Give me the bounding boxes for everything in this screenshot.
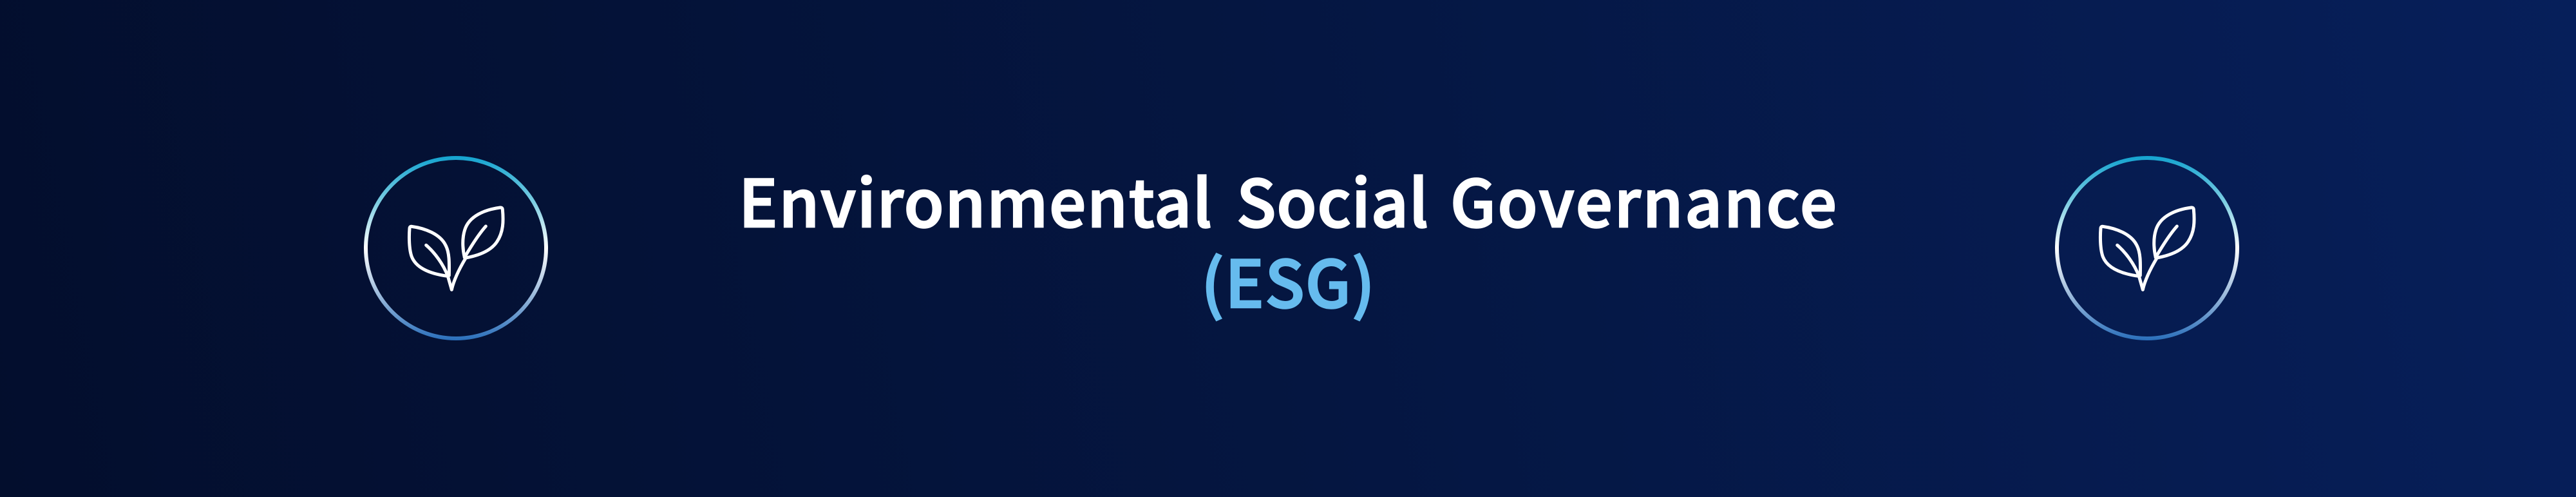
title: Environmental — [739, 152, 1212, 246]
icon: right leaf badge — [2057, 158, 2237, 338]
title: Governance — [1450, 152, 1837, 246]
subtitle: ESG: (ESG) — [1201, 233, 1375, 327]
icon: left leaf badge — [366, 158, 546, 338]
title: Social — [1236, 152, 1428, 246]
title — [739, 152, 1837, 246]
